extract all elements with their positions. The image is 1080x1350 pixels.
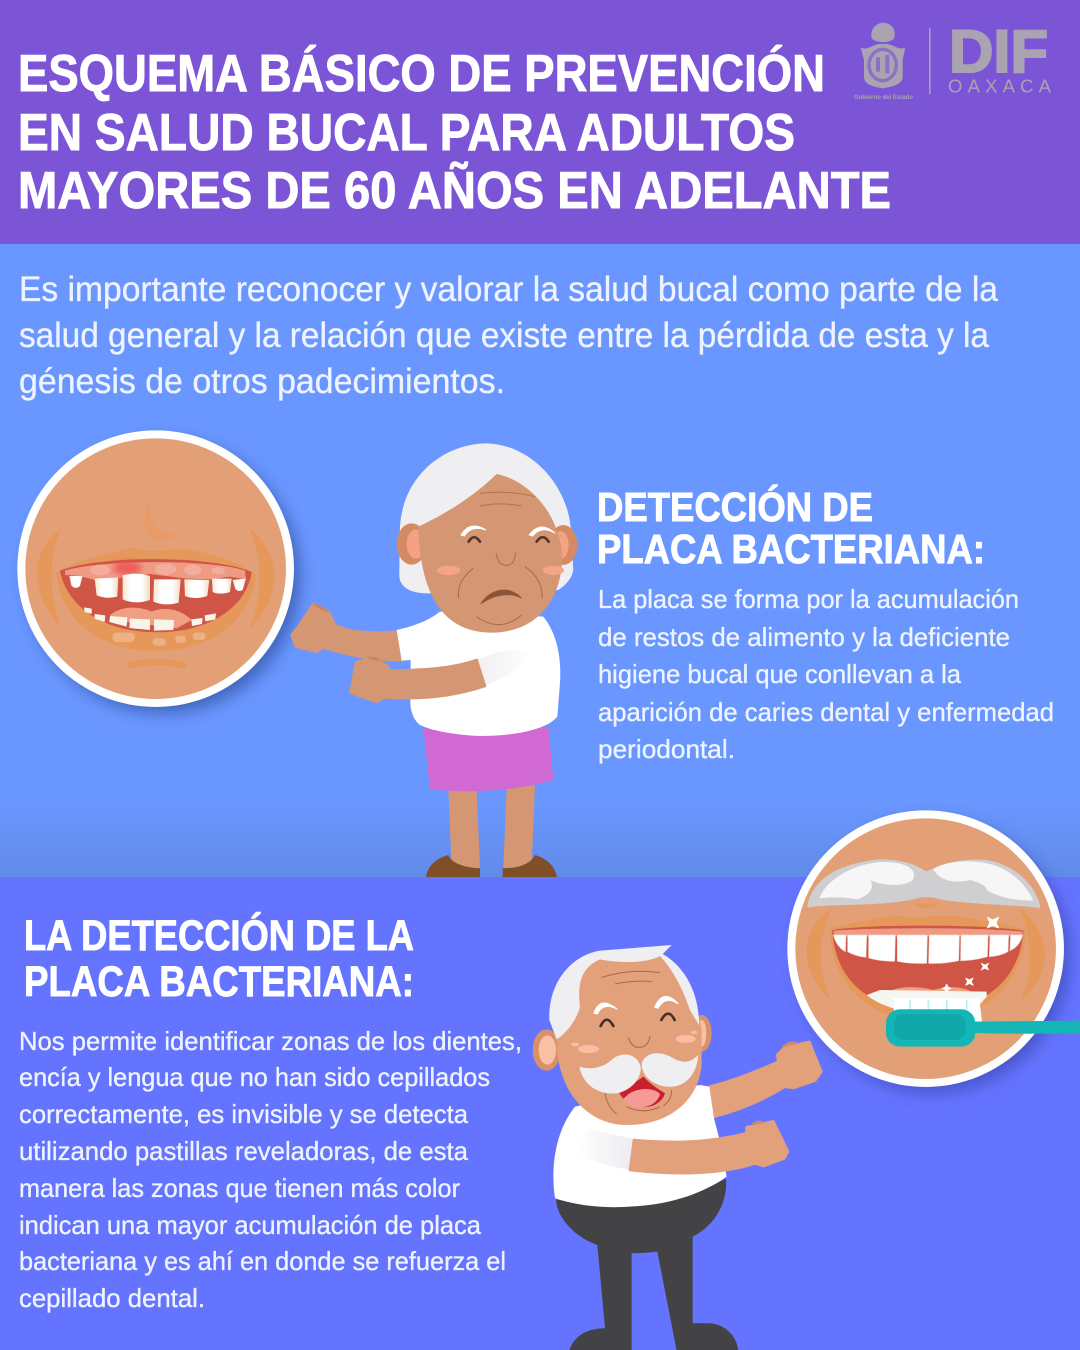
intro paragraph: salud general y la relación que existe entre la pérdida de esta y la (19, 316, 989, 355)
mustache (579, 1053, 698, 1094)
eyes (469, 537, 549, 542)
panel: intro background (0, 244, 1080, 877)
text block: plaque explanation: de restos de alimento y la deficiente (598, 622, 1010, 652)
upper gum (65, 562, 246, 580)
gum highlights (90, 563, 225, 575)
forehead lines (480, 492, 535, 506)
hair (549, 945, 699, 1039)
inflamed gum (113, 561, 141, 576)
text block: plaque explanation: periodontal. (598, 734, 735, 764)
heading: la detección: LA DETECCIÓN DE LA (24, 911, 414, 960)
illustration: clean mouth with toothbrush (787, 810, 1080, 1093)
text block: plaque explanation: aparición de caries dental y enfermedad (598, 697, 1054, 727)
blouse (397, 612, 560, 736)
eyes (601, 1014, 675, 1026)
icon: state crest (861, 23, 905, 88)
illustration: older man (533, 945, 821, 1350)
eyebrows (461, 526, 555, 536)
toothbrush head (886, 1009, 975, 1047)
back arm (292, 604, 403, 660)
upper teeth (69, 574, 246, 604)
illustration: older woman (292, 443, 577, 880)
wrinkles (458, 567, 542, 625)
front arm (351, 658, 485, 702)
header band (0, 0, 1080, 244)
hair (399, 443, 573, 593)
circle shadow (797, 820, 1070, 1093)
ears (533, 1029, 561, 1071)
chin wrinkles (605, 1090, 672, 1114)
knuckles (750, 1042, 798, 1126)
sparkles (942, 917, 999, 993)
panel: lower background (0, 877, 1080, 1350)
text block: disclosing tablets: indican una mayor acumulación de placa (19, 1210, 482, 1240)
blouse fold (477, 651, 533, 686)
lower teeth (84, 607, 216, 631)
title: EN SALUD BUCAL PARA ADULTOS (18, 104, 795, 162)
cheek creases (807, 908, 1045, 1002)
cheek creases (37, 528, 274, 629)
shirt fold (577, 1128, 634, 1170)
blush (578, 1045, 599, 1053)
lips (56, 548, 256, 651)
title: ESQUEMA BÁSICO DE PREVENCIÓN (18, 45, 825, 103)
upper teeth (833, 935, 1023, 963)
nose (628, 1036, 650, 1047)
legs (448, 785, 535, 868)
knuckles (312, 604, 382, 661)
mouth interior (832, 926, 1023, 1011)
tongue (623, 1089, 660, 1107)
shirt (553, 1085, 727, 1207)
text block: disclosing tablets: manera las zonas que tienen más color (19, 1173, 460, 1203)
front arm (630, 1121, 788, 1173)
circle frame (17, 430, 294, 707)
mustache (807, 859, 1041, 908)
intro paragraph: Es importante reconocer y valorar la salud bucal como parte de la (19, 270, 999, 309)
eyebrows (594, 996, 678, 1014)
frown (481, 590, 522, 604)
nose (144, 497, 177, 542)
shoes (426, 855, 557, 880)
intro paragraph: génesis de otros padecimientos. (19, 362, 505, 401)
DIF wordmark: DIF (949, 18, 1048, 85)
face skin (795, 818, 1056, 1079)
forehead lines (602, 971, 660, 984)
skirt (423, 727, 553, 791)
illustration: mouth with bacterial plaque (17, 430, 300, 713)
face (418, 474, 562, 633)
lower gum and teeth (887, 987, 973, 998)
text block: disclosing tablets: Nos permite identificar zonas de los dientes, (19, 1026, 522, 1056)
toothbrush handle (970, 1021, 1080, 1034)
lower lip highlights (112, 633, 205, 646)
back arm (710, 1042, 821, 1117)
chin crease (131, 662, 183, 665)
text block: disclosing tablets: cepillado dental. (19, 1283, 205, 1313)
text block: disclosing tablets (19, 1026, 522, 1313)
open mouth (619, 1077, 665, 1107)
text block: plaque explanation: La placa se forma por la acumulación (598, 584, 1019, 614)
nose (913, 903, 940, 908)
text block: disclosing tablets: utilizando pastillas reveladoras, de esta (19, 1136, 469, 1166)
ears (397, 523, 427, 565)
lips (830, 915, 1026, 1022)
circle frame (787, 810, 1064, 1087)
blush (437, 566, 460, 575)
text block: plaque explanation (598, 584, 1054, 764)
small crest caption: Gobierno del Estado (854, 94, 913, 101)
circle shadow (27, 440, 300, 713)
head (557, 956, 702, 1125)
text block: disclosing tablets: encía y lengua que no han sido cepillados (19, 1062, 490, 1092)
text block: plaque explanation: higiene bucal que conllevan a la (598, 659, 962, 689)
lower gum (110, 608, 192, 628)
panel: detection heading: PLACA BACTERIANA: (597, 526, 985, 572)
face skin (25, 438, 286, 699)
text block: disclosing tablets: correctamente, es invisible y se detecta (19, 1099, 469, 1129)
intro paragraph (19, 270, 999, 401)
toothbrush bristles (894, 998, 983, 1033)
mouth interior (60, 559, 252, 632)
title (18, 45, 891, 220)
heading: la detección: PLACA BACTERIANA: (24, 958, 414, 1006)
text block: disclosing tablets: bacteriana y es ahí en donde se refuerza el (19, 1246, 506, 1276)
OAXACA wordmark: OAXACA (948, 76, 1052, 96)
panel: detection heading: DETECCIÓN DE (597, 484, 873, 530)
logo divider (929, 28, 931, 94)
trousers (556, 1178, 738, 1350)
heading: la detección (24, 911, 414, 1006)
upper gum (833, 928, 1023, 937)
nose (496, 553, 515, 565)
logos: Gobierno del Estado and DIF Oaxaca (854, 18, 1052, 101)
panel: detection heading (597, 484, 985, 572)
title: MAYORES DE 60 AÑOS EN ADELANTE (18, 161, 891, 220)
